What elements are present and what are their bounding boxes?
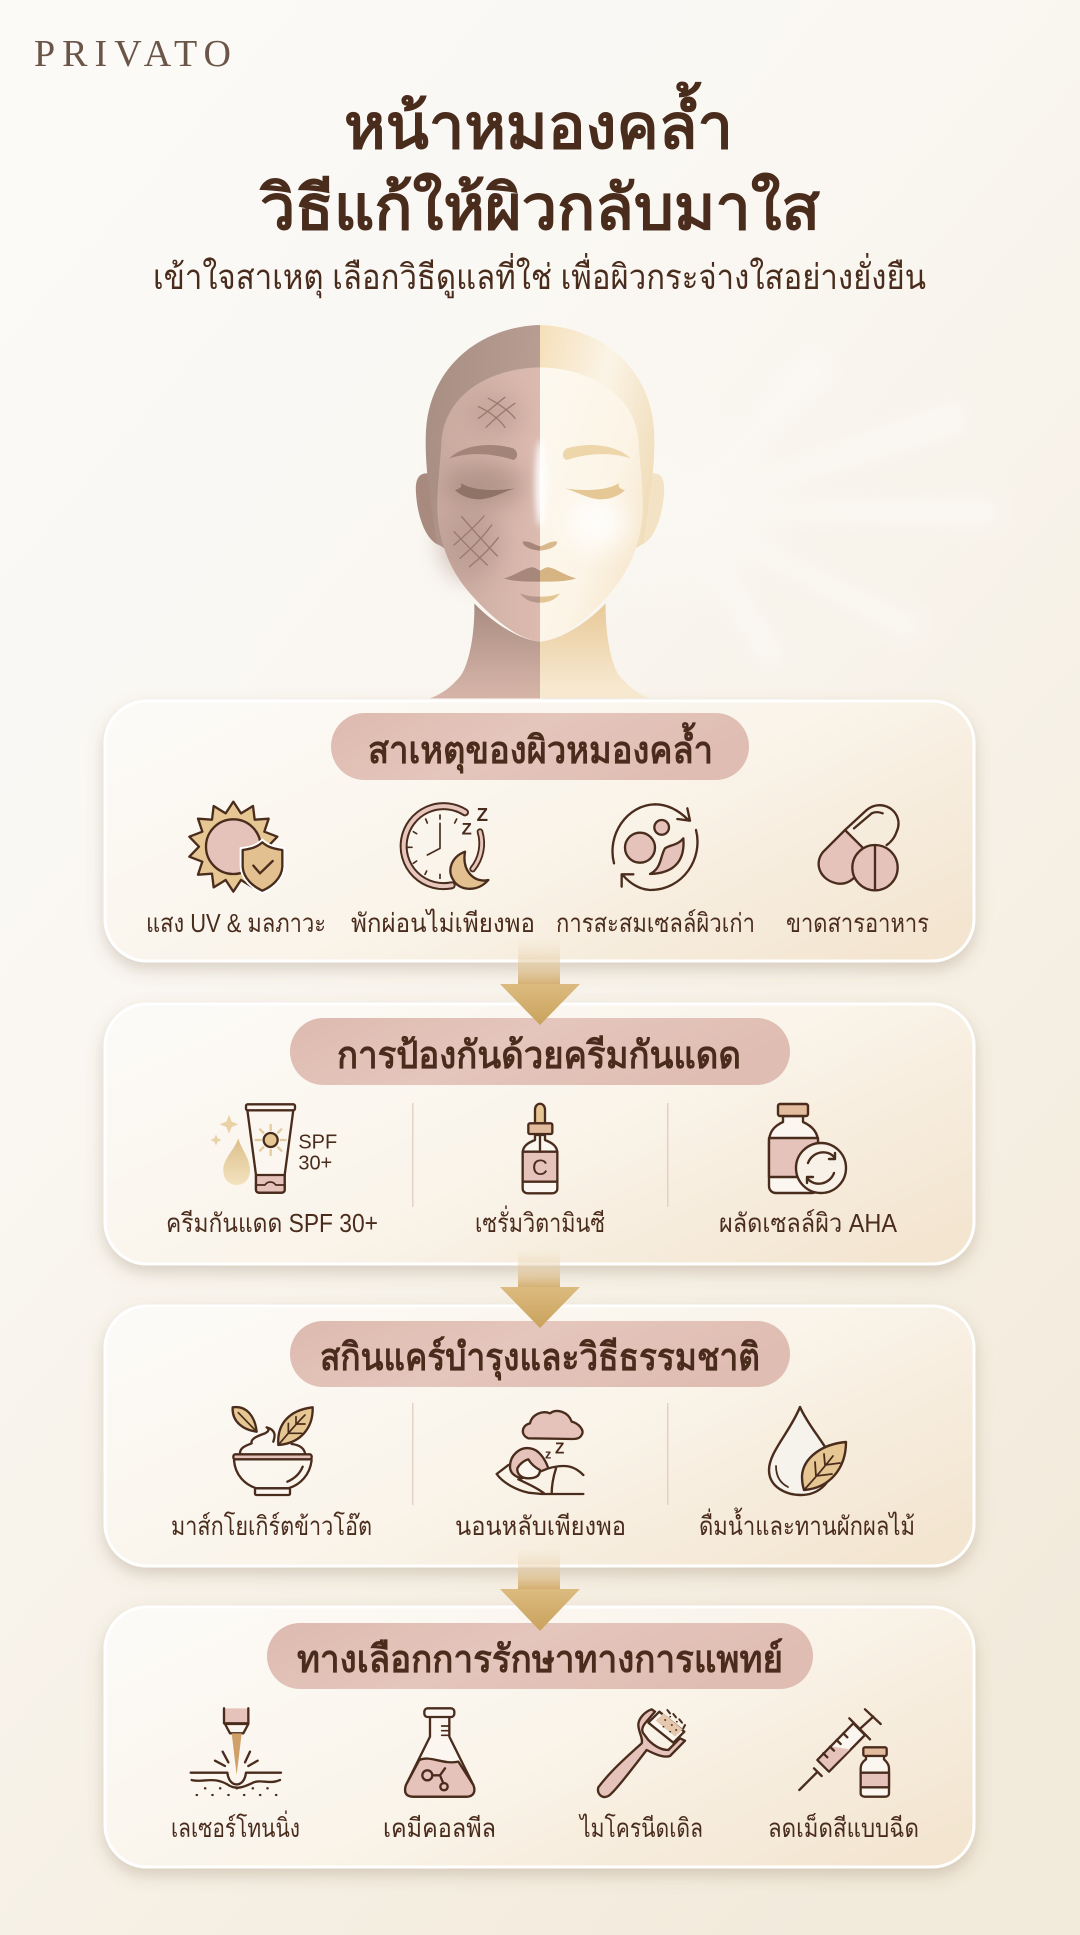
right radiant half of face [540, 325, 664, 698]
label: UV and pollution: แสง UV & มลภาวะ [146, 908, 326, 938]
heading pill: causes [331, 713, 749, 780]
arrow 3 [500, 1550, 580, 1631]
heading pill: prevention: การป้องกันด้วยครีมกันแดด [337, 1035, 741, 1077]
label: not enough rest: พักผ่อนไม่เพียงพอ [351, 908, 535, 938]
centre glow [535, 440, 546, 527]
label: vitamin C serum: เซรั่มวิตามินซี [475, 1205, 605, 1238]
face illustration: half dull, half radiant [416, 325, 664, 698]
label: lack of nutrients: ขาดสารอาหาร [786, 908, 929, 938]
arrow 2 [500, 1250, 580, 1328]
title: วิธีแก้ให้ผิวกลับมาใส [259, 172, 820, 243]
label: enough sleep: นอนหลับเพียงพอ [455, 1511, 626, 1541]
icon: sunscreen tube [210, 1104, 337, 1193]
heading pill: medical: ทางเลือกการรักษาทางการแพทย์ [297, 1638, 783, 1681]
icon: skin cell cycle [612, 804, 698, 890]
icon: vitamin C serum [523, 1104, 557, 1193]
subtitle: เข้าใจสาเหตุ เลือกวิธีดูแลที่ใช่ เพื่อผิวกระจ่างใสอย่างยั่งยืน [153, 253, 926, 298]
label: laser toning: เลเซอร์โทนนิ่ง [171, 1810, 300, 1843]
label: microneedling: ไมโครนีดเดิล [578, 1813, 703, 1843]
decorative light rays [560, 350, 1000, 670]
panel: skincare and natural methods [105, 1306, 974, 1566]
heading pill: causes: สาเหตุของผิวหมองคล้ำ [368, 722, 713, 774]
label: drink water and eat vegetables: ดื่มน้ำและทานผักผลไม้ [699, 1507, 915, 1541]
icon: sleeping person and cloud [497, 1411, 583, 1494]
icon: sleeping person and cloud: z [545, 1447, 551, 1461]
icon: vitamin C serum: C [532, 1155, 548, 1180]
brand logo: PRIVATO [34, 33, 231, 75]
label: AHA exfoliant: ผลัดเซลล์ผิว AHA [719, 1208, 898, 1238]
left dull half of face [416, 325, 540, 698]
arrow 1 [500, 940, 580, 1025]
panel: medical treatment options [105, 1607, 974, 1867]
label: pigment injection: ลดเม็ดสีแบบฉีด [768, 1812, 919, 1843]
heading pill: prevention [290, 1018, 790, 1085]
icon: clock and moon: Z [477, 804, 488, 825]
panel: causes of dull skin [105, 701, 974, 961]
icon: yogurt oat mask bowl [233, 1407, 313, 1495]
title [259, 81, 820, 243]
icon: chemical peel flask [405, 1708, 474, 1797]
heading pill: skincare: สกินแคร์บำรุงและวิธีธรรมชาติ [320, 1336, 760, 1381]
icon: sunscreen tube: 30+ [298, 1153, 332, 1175]
title: หน้าหมองคล้ำ [344, 81, 733, 162]
icon: water drop and leaf [769, 1407, 846, 1495]
icon: capsule and tablet [819, 805, 899, 890]
label: old skin cells: การสะสมเซลล์ผิวเก่า [556, 908, 755, 938]
heading pill: skincare [290, 1321, 790, 1387]
label: chemical peel: เคมีคอลพีล [383, 1813, 496, 1843]
label: yogurt oat mask: มาส์กโยเกิร์ตข้าวโอ๊ต [171, 1511, 372, 1541]
heading pill: medical [267, 1623, 813, 1689]
icon: clock and moon [404, 804, 488, 889]
label: sunscreen SPF 30+: ครีมกันแดด SPF 30+ [166, 1208, 378, 1238]
icon: microneedling roller [598, 1709, 685, 1797]
icon: clock and moon: Z [462, 819, 472, 838]
icon: sun and shield [189, 802, 282, 892]
icon: sunscreen tube: SPF [298, 1132, 337, 1154]
icon: laser toning [191, 1708, 281, 1795]
panel: prevention with sunscreen [105, 1004, 974, 1264]
icon: AHA exfoliant bottle [769, 1104, 846, 1193]
icon: sleeping person and cloud: Z [555, 1440, 564, 1457]
icon: syringe and vial [799, 1709, 889, 1797]
